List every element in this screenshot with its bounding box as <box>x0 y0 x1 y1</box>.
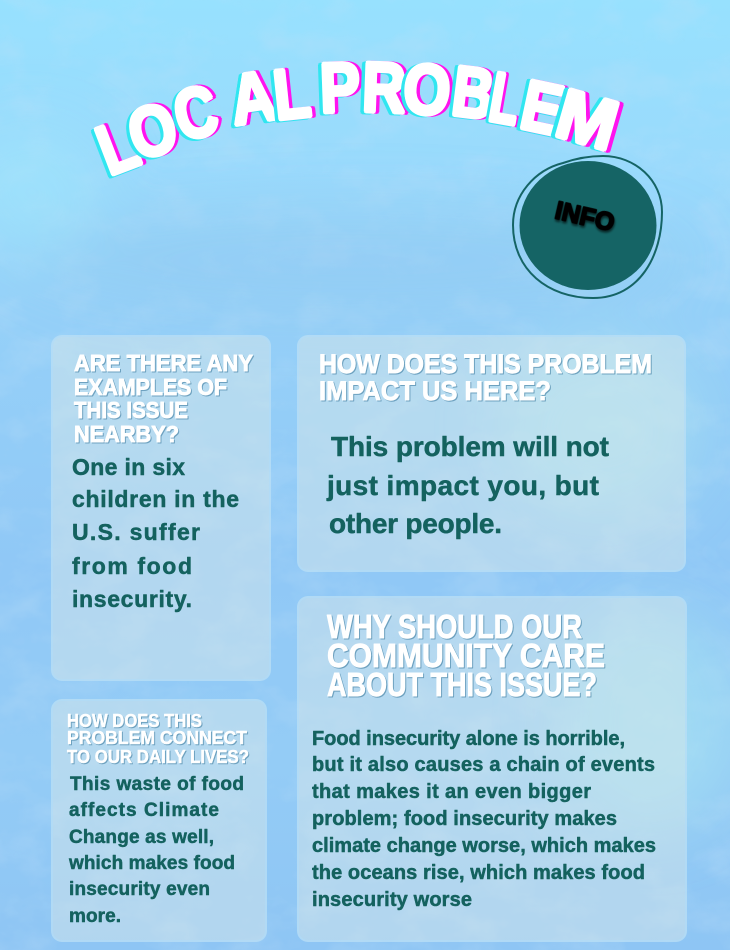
heading: community care <box>327 608 605 703</box>
heading: nearby examples: NEARBY? <box>74 421 179 447</box>
body: daily lives: insecurity even <box>69 879 210 900</box>
body: community care: Food insecurity alone is horrible, <box>312 728 625 750</box>
body: community care: the oceans rise, which makes food <box>312 862 645 884</box>
heading: local impact <box>319 349 652 406</box>
body: daily lives: Change as well, <box>69 827 214 848</box>
heading: community care: COMMUNITY CARE <box>327 637 605 674</box>
title: LOCAL PROBLEM: M <box>548 74 626 167</box>
body: daily lives: which makes food <box>68 853 235 874</box>
heading: nearby examples: ARE THERE ANY <box>74 350 253 376</box>
body: local impact: other people. <box>329 508 502 539</box>
heading: community care: WHY SHOULD OUR <box>327 608 582 645</box>
title: LOCAL PROBLEM <box>86 48 626 191</box>
heading: daily lives: HOW DOES THIS <box>67 711 202 731</box>
heading: nearby examples: EXAMPLES OF <box>74 374 227 400</box>
body: community care <box>312 728 656 911</box>
body: nearby examples: from food <box>72 553 192 579</box>
heading: community care: ABOUT THIS ISSUE? <box>327 666 597 703</box>
heading: daily lives <box>67 711 249 767</box>
body: daily lives: more. <box>69 906 121 927</box>
title: LOCAL PROBLEM: C <box>167 70 225 157</box>
body: daily lives: This waste of food <box>70 774 244 795</box>
title: LOCAL PROBLEM: P <box>318 48 361 129</box>
body: nearby examples: U.S. suffer <box>72 519 200 545</box>
badge circle <box>520 161 656 290</box>
panel: nearby examples <box>51 335 271 681</box>
heading: local impact: HOW DOES THIS PROBLEM <box>319 349 652 379</box>
title: LOCAL PROBLEM: R <box>361 48 407 129</box>
body: nearby examples: insecurity. <box>72 586 192 612</box>
body: nearby examples: One in six <box>72 454 185 480</box>
heading: daily lives: PROBLEM CONNECT <box>67 728 247 748</box>
panel: community care <box>297 596 687 942</box>
body: community care: problem; food insecurity makes <box>312 808 617 830</box>
body: community care: but it also causes a chain of events <box>312 754 655 776</box>
body: local impact <box>326 431 609 539</box>
panel: daily lives <box>51 699 267 942</box>
title: LOCAL PROBLEM: O <box>120 87 186 176</box>
heading: nearby examples: THIS ISSUE <box>74 397 188 423</box>
body: community care: climate change worse, which makes <box>312 835 656 857</box>
title: LOCAL PROBLEM: A <box>224 56 281 141</box>
body: daily lives <box>68 774 244 927</box>
heading: local impact: IMPACT US HERE? <box>319 376 551 406</box>
body: community care: insecurity worse <box>312 889 472 911</box>
heading: daily lives: TO OUR DAILY LIVES? <box>67 747 249 767</box>
title: LOCAL PROBLEM: O <box>401 49 453 132</box>
body: nearby examples: children in the <box>72 486 239 512</box>
body: daily lives: affects Climate <box>69 800 219 821</box>
body: nearby examples <box>72 454 239 612</box>
title: LOCAL PROBLEM: E <box>514 66 570 151</box>
heading: nearby examples <box>74 350 253 447</box>
title: LOCAL PROBLEM: B <box>448 52 498 135</box>
badge label: INFO <box>552 197 617 237</box>
body: community care: that makes it an even bigger <box>312 781 591 803</box>
title: LOCAL PROBLEM: L <box>86 104 149 191</box>
badge hand-drawn ring <box>513 156 662 298</box>
body: local impact: just impact you, but <box>326 470 599 501</box>
title: LOCAL PROBLEM: L <box>484 58 526 141</box>
body: local impact: This problem will not <box>331 431 609 462</box>
title: LOCAL PROBLEM: L <box>269 53 314 136</box>
panel: local impact <box>297 335 686 572</box>
